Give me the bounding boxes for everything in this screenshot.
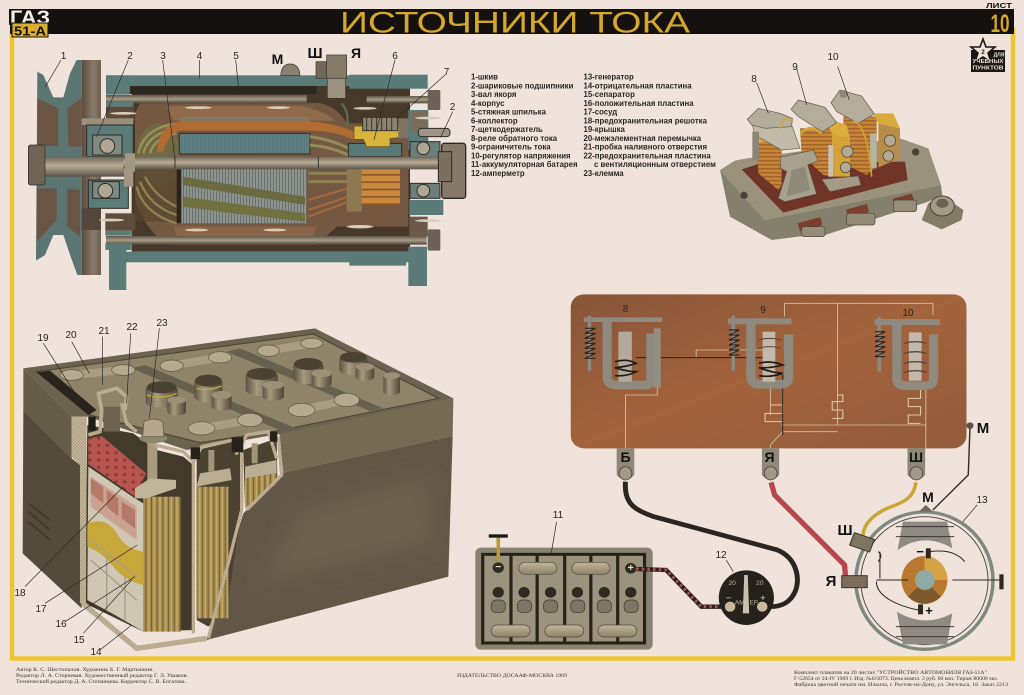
commutator and brush holder [347,117,408,212]
panel: generator cutaway [28,45,466,290]
footer: print details: Фабрика цветной печати им. Ильича, г. Ростов-на-Дону, ул. Энгельса, 18. Заказ 2213 [794,683,1009,688]
battery labels: 16 [55,619,67,630]
badge: for training centres [971,39,1005,72]
legend: parts list 1-12: 3-вал якоря [471,90,516,99]
housing [105,75,443,290]
armature interior [132,85,410,252]
leader lines [757,67,849,113]
legend: parts list 13-23: 19-крышка [584,125,625,134]
legend: parts list 13-23: 15-сепаратор [584,90,635,99]
legend: parts list 13-23: с вентиляционным отверстием [594,160,716,169]
armature shaft [28,145,452,187]
legend: parts list 1-12: 2-шариковые подшипники [471,81,574,90]
legend: parts list 13-23: 21-пробка наливного отверстия [584,142,707,152]
generator labels: Я [351,45,361,61]
legend: parts list 1-12: 11-аккумуляторная батарея [471,160,578,169]
schematic labels [553,304,989,618]
interior section [85,407,277,632]
legend: parts list 1-12: 5-стяжная шпилька [471,108,547,116]
logo: GAZ 51-A [9,8,50,38]
legend: parts list 13-23 [584,72,716,178]
armature core [157,117,354,223]
legend: parts list 1-12 [471,72,578,178]
generator labels: 7 [444,67,450,78]
tie rods [106,90,440,251]
terminals Ш and Я [316,55,348,127]
safety grid [88,436,146,497]
airflow arrows [99,106,442,231]
relay labels [751,52,839,85]
legend: parts list 13-23: 20-межэлементная перемычка [584,134,702,143]
black cable [625,482,797,607]
sheet number: 10 [990,10,1010,38]
footer: publisher: ИЗДАТЕЛЬСТВО ДОСААФ-МОСКВА 1969 [457,674,568,679]
board wiring [625,303,933,448]
footer: credits: Автор К. С. Шестопалов. Художник Б. Г. Мартынкин. [16,668,154,673]
generator labels: 3 [160,51,166,62]
footer: print details: Г-52654 от 24-IV 1969 г. Изд. №6/5073. Цена компл. 2 руб. 60 коп. Тираж 80000 экз. [794,676,998,682]
legend: parts list 13-23: 23-клемма [584,169,624,178]
legend: parts list 1-12: 9-ограничитель тока [471,142,551,152]
schematic labels: 12 [715,550,727,561]
logo: GAZ 51-A: 51-А [14,24,47,38]
legend: parts list 13-23: 22-предохранительная пластина [584,151,711,160]
schematic labels: 13 [976,495,988,506]
legend: parts list 1-12: 8-реле обратного тока [471,134,558,143]
leader lines [45,60,453,160]
base plate [720,138,963,240]
generator labels: М [272,51,283,67]
battery labels: 19 [37,333,49,344]
yellow cable [863,482,916,535]
legend: parts list 1-12: 4-корпус [471,99,505,108]
plate packs [143,473,277,632]
sheet number: ЛИСТ [986,3,1013,10]
battery schematic 11: + [628,563,634,574]
ammeter 12 [719,570,774,625]
battery schematic 11 [475,534,653,650]
pulley [36,60,101,275]
battery labels: 17 [35,604,47,615]
legend: parts list 13-23: 16-положительная пластина [584,99,694,108]
relay labels: 8 [751,74,757,85]
relay 10 [831,90,900,177]
battery labels: 22 [126,322,138,333]
terminal post 23 [135,419,277,498]
schematic labels: Я [764,449,775,465]
ammeter 12: ЕР [750,599,758,606]
schematic labels: 8 [623,304,629,315]
footer: print details: Комплект плакатов на 20 листах "УСТРОЙСТВО АВТОМОБИЛЯ ГАЗ-51А" [794,670,987,676]
legend: parts list 13-23: 14-отрицательная пластина [584,81,692,90]
bearings [82,118,466,230]
badge: for training centres: УЧЕБНЫХ [972,59,1004,65]
sheet number [986,3,1013,38]
relay labels: 10 [827,52,839,63]
generator labels: Ш [307,45,323,62]
ammeter 12: − [726,593,732,604]
schematic labels: Я [826,573,836,590]
ammeter 12: 20 [756,580,764,587]
schematic labels: − [916,544,924,559]
cell plugs [146,352,400,416]
legend: parts list 13-23: 18-предохранительная решотка [584,116,708,125]
positive and negative plates [87,467,143,632]
relay board [571,294,966,448]
battery labels [14,318,168,658]
badge: for training centres: 2 [981,50,985,56]
generator labels: 1 [61,51,67,62]
badge: for training centres: ДЛЯ [993,52,1005,58]
relay 9 [791,100,861,192]
battery labels: 20 [65,330,77,341]
generator labels [61,45,456,113]
battery labels: 18 [14,588,26,599]
terminal screw M [281,64,300,75]
generator labels: 6 [392,51,398,62]
right face [207,398,453,640]
top cover [23,328,453,450]
red cable [771,482,846,587]
generator schematic 13 [842,505,1004,649]
relay 8 [747,108,818,202]
legend: parts list 13-23: 13-генератор [584,72,634,82]
ammeter 12: АМ [735,599,744,606]
panel: battery cutaway [14,318,453,658]
footer: print details [794,670,1009,688]
mass wire [933,427,970,510]
schematic labels: М [977,420,989,437]
schematic labels: 11 [553,510,564,521]
hatched case walls [72,388,282,648]
battery labels: 14 [90,647,102,658]
schematic labels: 9 [760,305,766,316]
schematic labels: М [922,489,934,505]
footer: credits: Технический редактор Д. А. Степанцева. Корректор С. В. Богатова. [16,680,186,685]
schematic labels: 10 [902,308,914,319]
generator labels: 4 [197,51,203,62]
schematic labels: Ш [837,522,853,539]
schematic labels: + [925,603,933,618]
logo: GAZ 51-A: ГАЗ [10,8,50,29]
relay 8 schematic [584,316,662,388]
battery schematic 11: − [495,562,501,573]
battery labels: 23 [156,318,168,329]
footer: credits [16,668,188,685]
generator labels: 2 [450,102,456,113]
terminal tabs [617,448,925,480]
cell links [60,338,359,435]
ammeter 12: 20 [728,580,736,587]
footer: credits: Редактор Л. А. Сторчевая. Художественный редактор Г. Л. Ушаков. [16,674,188,679]
legend: parts list 13-23: 17-сосуд [584,108,617,116]
panel: relay regulator block [720,52,963,240]
panel: wiring schematic [475,294,1004,650]
generator labels: 2 [127,51,133,62]
left face [23,368,82,608]
schematic labels: Б [620,449,631,465]
legend: parts list 1-12: 10-регулятор напряжения [471,151,571,160]
legend: parts list 1-12: 7-щеткодержатель [471,125,543,134]
generator labels: 5 [233,51,239,62]
schematic labels: Ш [909,449,923,465]
battery labels: 21 [98,326,110,337]
twisted battery cable [636,569,724,607]
legend: parts list 1-12: 12-амперметр [471,169,525,178]
title: ИСТОЧНИКИ ТОКА [340,6,690,40]
title bar [10,9,1014,34]
battery labels: 15 [73,635,85,646]
legend: parts list 1-12: 1-шкив [471,72,498,82]
ammeter 12: + [760,593,766,604]
badge: for training centres: ПУНКТОВ [972,66,1004,72]
leader lines [25,328,159,650]
relay 9 schematic [728,316,792,384]
legend: parts list 1-12: 6-коллектор [471,116,518,125]
relay labels: 9 [792,62,798,73]
leader lines [551,505,977,572]
relay 10 schematic [875,317,940,386]
